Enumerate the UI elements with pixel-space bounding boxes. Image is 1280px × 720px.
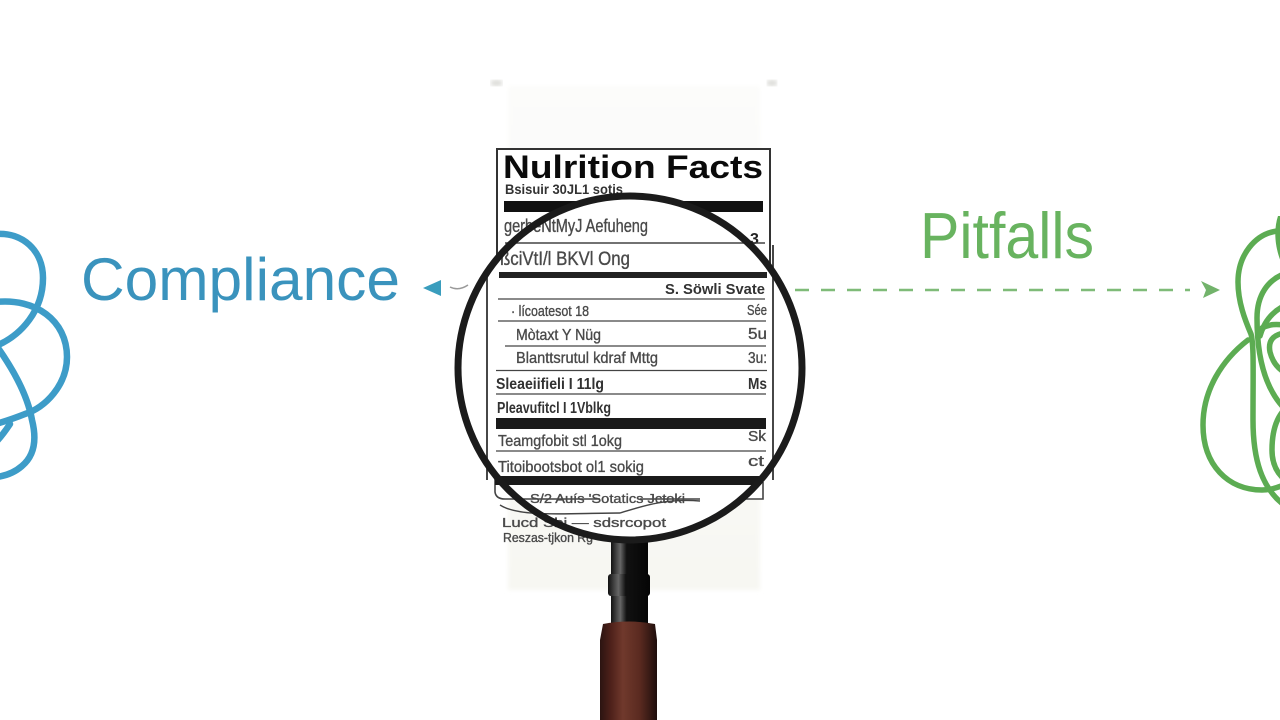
thick rule bottom xyxy=(495,476,761,485)
row: calories: ßciVtI/l BKVl Ong xyxy=(500,249,630,270)
panel: nutrition label xyxy=(495,149,770,499)
footnote: S/2 Auís 'Sotatics Jctoki xyxy=(530,491,685,506)
heading: Pitfalls: Pitfalls xyxy=(920,199,1094,272)
row: daily value header: S. Söwli Svate xyxy=(665,281,765,298)
row 4: Ms xyxy=(748,376,767,393)
row 1: · lícoatesot 18 xyxy=(511,303,589,320)
thick rule lower xyxy=(496,418,766,429)
row 5: Pleavufitcl I 1Vblkg xyxy=(497,400,611,417)
row 7: ct xyxy=(748,453,765,470)
row 1: Sée xyxy=(747,302,767,319)
thick rule xyxy=(504,201,763,212)
row 6: Teamgfobit stl 1okg xyxy=(498,433,622,450)
row 2: Mòtaxt Y Nüg xyxy=(516,327,601,344)
row rules xyxy=(496,299,767,451)
row 4: Sleaeiifieli I 11lg xyxy=(496,376,604,393)
row 4 xyxy=(496,376,767,393)
fine print: Reszas-tjkon Rg xyxy=(503,530,593,545)
rule xyxy=(505,242,765,244)
row 1 xyxy=(511,302,767,320)
collar xyxy=(608,574,650,596)
fine print: Lucd Sbi — sdsrcopot xyxy=(502,515,666,530)
row mark: 3 xyxy=(750,231,759,248)
magnified label content xyxy=(487,216,773,545)
row 3: 3u: xyxy=(748,350,767,367)
row 6: Sk xyxy=(748,428,767,445)
label title: Nulrition Facts xyxy=(503,149,763,185)
arrow: to Pitfalls xyxy=(795,281,1220,298)
arrow: to Compliance xyxy=(423,280,468,296)
wooden grip xyxy=(600,622,657,720)
magnifier handle xyxy=(600,540,657,720)
neck xyxy=(611,540,648,624)
icon: green knot xyxy=(1203,216,1280,505)
medium rule xyxy=(499,272,767,278)
magnifier ring xyxy=(458,196,802,540)
row 3: Blanttsrutul kdraf Mttg xyxy=(516,350,658,367)
magnifier lens interior xyxy=(458,196,802,540)
row: serving heading: gerbeNtMyJ Aefuheng xyxy=(504,216,648,236)
row 3 xyxy=(516,350,767,367)
serving line: Bsisuir 30JL1 sotis xyxy=(505,181,623,197)
icon: blue knot xyxy=(0,234,67,477)
fine print xyxy=(500,500,700,545)
row 7: Titoibootsbot ol1 sokig xyxy=(498,459,644,476)
panel: supplement bag xyxy=(491,80,777,590)
heading: Compliance: Compliance xyxy=(81,246,400,313)
row 7 xyxy=(498,453,765,476)
row 2 xyxy=(516,326,767,344)
row 6 xyxy=(498,428,767,450)
row 2: 5u xyxy=(748,326,767,343)
